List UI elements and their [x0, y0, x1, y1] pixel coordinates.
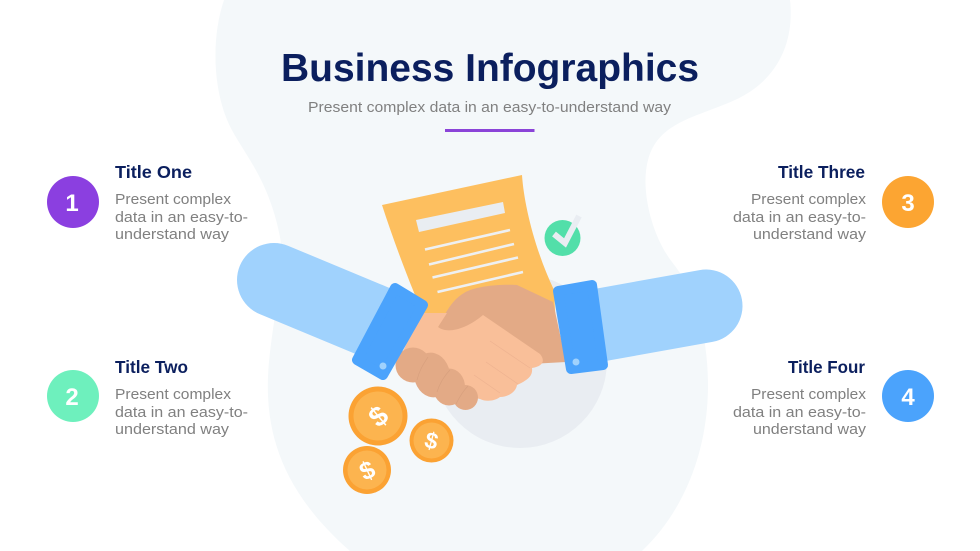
heading: title two: Title Two [115, 357, 188, 377]
title underline [445, 129, 534, 132]
item 4 [733, 357, 934, 438]
coin: medium: $ [422, 426, 441, 455]
right sleeve [600, 306, 706, 325]
text: description two [115, 387, 248, 438]
background blob [215, 0, 791, 551]
text: description four: Present complex [751, 387, 867, 403]
text: description one: data in an easy-to- [115, 210, 248, 226]
text: description one: understand way [115, 227, 230, 243]
left hand [396, 313, 543, 401]
text: description two: data in an easy-to- [115, 405, 248, 421]
document [382, 175, 556, 330]
left sleeve [274, 280, 375, 322]
finger creases [474, 341, 530, 393]
text: description one: Present complex [115, 192, 232, 208]
fingers [396, 348, 478, 410]
badge 3: 3 [901, 190, 915, 217]
badge 2: 2 [65, 384, 79, 411]
badge 4 [882, 370, 934, 422]
item 1 [47, 162, 248, 243]
heading: title one: Title One [115, 162, 192, 182]
coin: medium [410, 418, 454, 462]
item 2 [47, 357, 248, 438]
text: description four [733, 387, 867, 438]
right hand [438, 285, 566, 364]
item 3 [733, 162, 934, 243]
text: description three: data in an easy-to- [733, 210, 866, 226]
text: description three [733, 192, 867, 243]
badge 2 [47, 370, 99, 422]
coin: small: $ [355, 455, 380, 487]
heading: title four: Title Four [788, 357, 865, 377]
badge 1: 1 [65, 190, 79, 217]
badge 3 [882, 176, 934, 228]
text: description four: understand way [753, 422, 867, 438]
illustration: handshake [274, 175, 706, 494]
text: description one [115, 192, 248, 243]
badge 4: 4 [901, 384, 915, 411]
text: description two: understand way [115, 422, 230, 438]
subtitle: Present complex data in an easy-to-understand way [308, 99, 672, 116]
badge 1 [47, 176, 99, 228]
coin: small [343, 446, 391, 494]
title: Business Infographics [281, 47, 699, 90]
heading: title three: Title Three [778, 162, 865, 182]
coin: large: $ [362, 399, 395, 433]
left cuff [357, 288, 423, 375]
icon: check badge [544, 216, 580, 256]
text: description two: Present complex [115, 387, 232, 403]
text: description four: data in an easy-to- [733, 405, 866, 421]
grey circle behind hands [433, 274, 607, 448]
coin: large [348, 386, 408, 446]
text: description three: Present complex [751, 192, 867, 208]
right cuff [558, 285, 603, 369]
text: description three: understand way [753, 227, 867, 243]
